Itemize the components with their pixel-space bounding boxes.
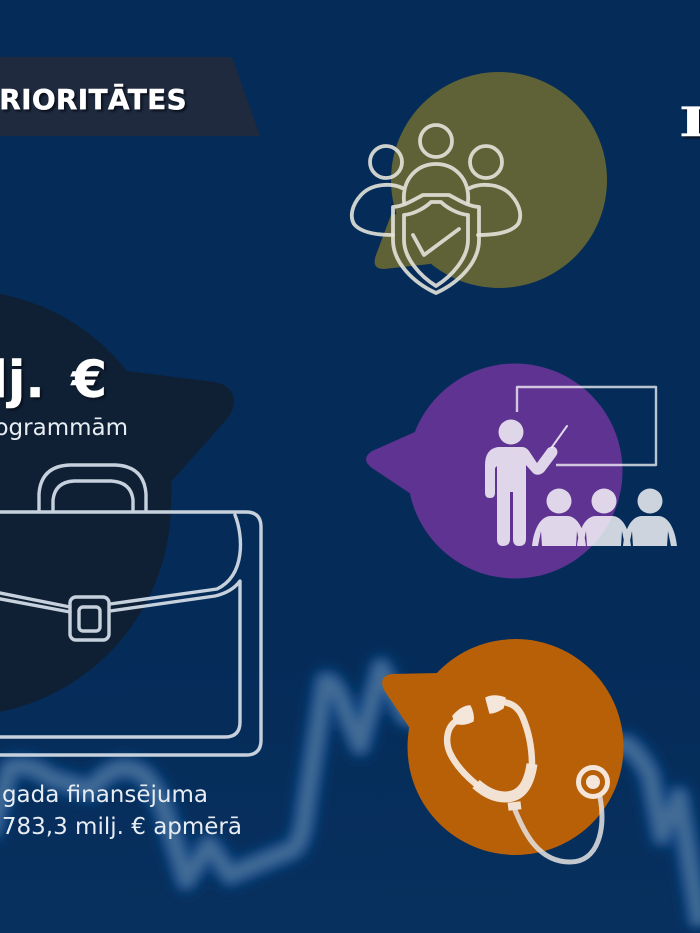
bubble: orange [382,639,624,855]
funding text: 783,3 milj. € apmērā [2,814,242,840]
funding text [2,782,242,840]
icon: teacher and students [485,387,677,546]
icon: briefcase [0,465,261,755]
bubble: olive [375,72,607,288]
funding text: gada finansējuma [2,782,208,808]
dark speech bubble [0,290,234,716]
icon: people with shield [352,125,520,293]
banner [0,57,260,136]
blurred background line chart [0,668,700,925]
heading: priorities: RIORITĀTES [0,83,187,116]
bubble: purple [366,364,622,578]
icon: stethoscope [447,696,608,862]
